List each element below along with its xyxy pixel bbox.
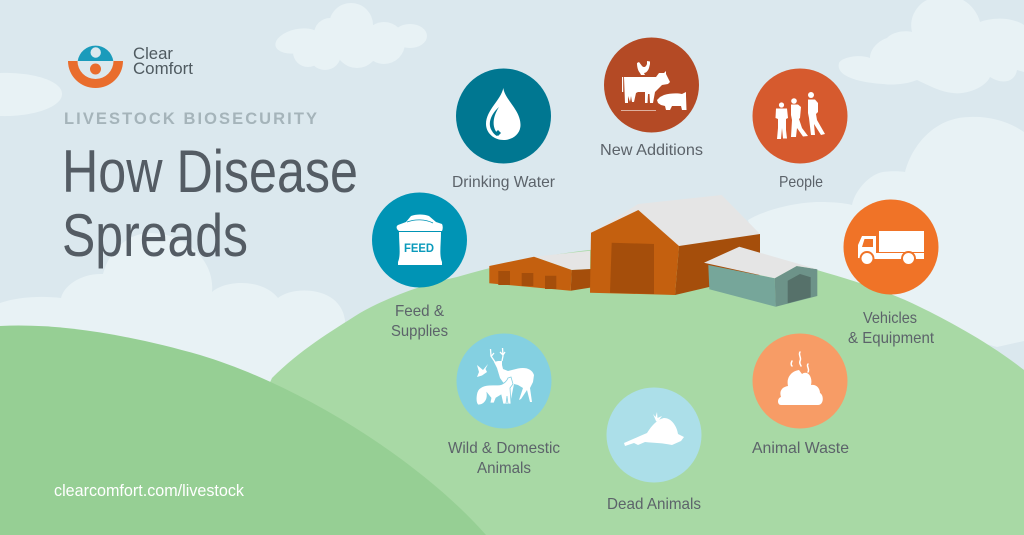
icon: people	[752, 68, 848, 164]
title: How Disease	[62, 138, 358, 205]
label: People	[779, 174, 823, 191]
label: Vehicles	[863, 310, 917, 327]
logo wordmark: Comfort	[133, 60, 193, 78]
eyebrow heading: LIVESTOCK BIOSECURITY	[64, 110, 317, 128]
label: Dead Animals	[607, 496, 701, 513]
icon: animal waste	[752, 334, 848, 428]
icon: new additions	[604, 38, 699, 132]
barn group	[489, 195, 817, 307]
label: Animal Waste	[752, 440, 849, 457]
label: Animals	[477, 460, 531, 477]
label: Feed &	[395, 303, 444, 320]
icon: wild animals	[456, 334, 552, 428]
logo wordmark: Clear	[133, 45, 174, 63]
website url: clearcomfort.com/livestock	[54, 482, 245, 500]
label: New Additions	[600, 142, 703, 159]
clouds	[0, 0, 1024, 395]
hill: large back hill	[200, 246, 1024, 535]
title: Spreads	[62, 202, 248, 269]
icon: truck	[844, 200, 938, 294]
icon: drinking water	[456, 68, 551, 164]
label: Supplies	[391, 323, 448, 340]
icon: dead animal	[606, 388, 702, 482]
label: & Equipment	[848, 330, 935, 347]
icon: feed sack	[372, 192, 467, 288]
logo	[68, 45, 193, 88]
hill: front left hill	[0, 326, 486, 535]
label: Wild & Domestic	[448, 440, 560, 457]
label: Drinking Water	[452, 174, 556, 191]
icon: feed sack: FEED	[404, 243, 434, 255]
